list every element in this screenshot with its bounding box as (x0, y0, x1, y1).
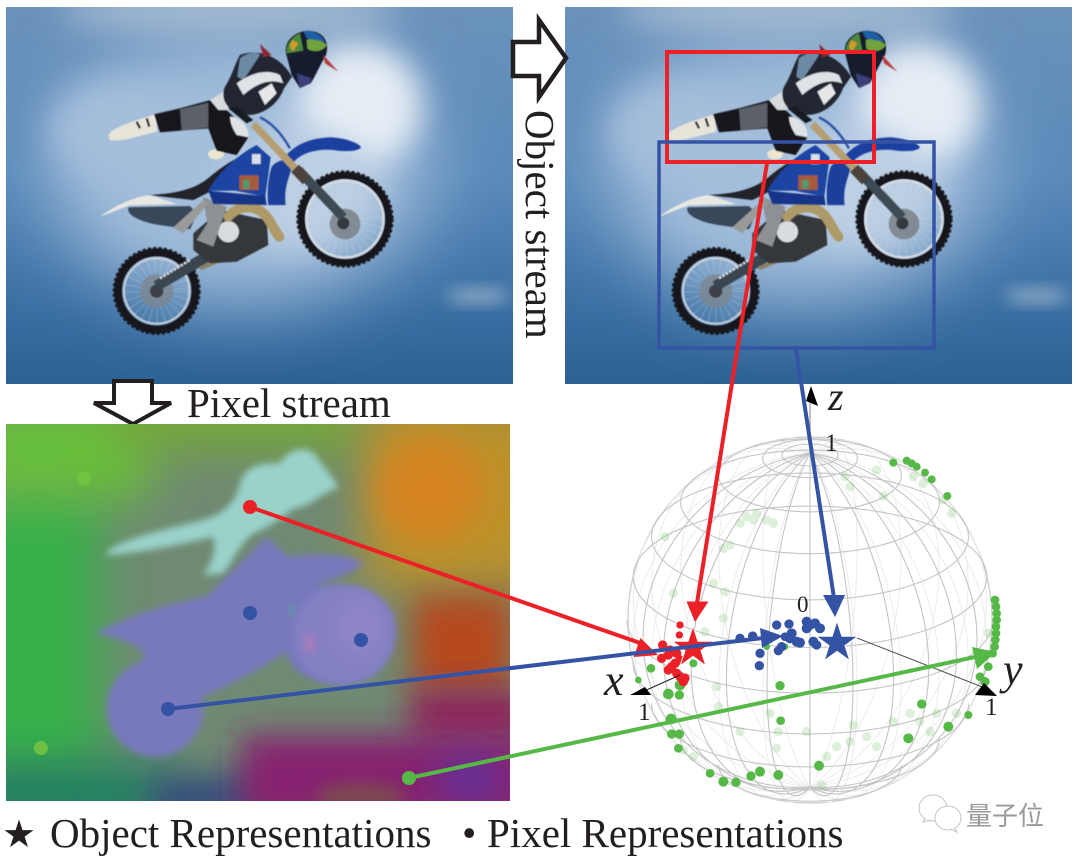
arrow: red box to object star (686, 163, 767, 622)
longitude lines (643, 453, 977, 796)
red pixel dots (657, 621, 690, 686)
axis: y: 1 (985, 694, 998, 721)
origin label: 0 (797, 592, 808, 617)
arrow: object stream (513, 20, 566, 97)
axis: x: 1 (638, 699, 650, 726)
arrow: red pixel to sphere (243, 500, 658, 657)
panel: photo with object boxes (565, 0, 1072, 384)
label: object stream: Object stream (517, 110, 563, 339)
faint back-side green dots (660, 465, 993, 790)
blue bounding box (659, 142, 934, 348)
panel: pixel embedding map (6, 424, 510, 801)
panel: input photo (6, 0, 513, 384)
arrow: green pixel to sphere (402, 647, 996, 785)
legend: object representations: ★ (2, 812, 36, 856)
latitude lines (627, 439, 993, 801)
green pixel point (34, 741, 48, 755)
legend: object representations: Object Representations (50, 810, 431, 856)
label: pixel stream: Pixel stream (187, 380, 391, 426)
rider silhouette (107, 449, 338, 575)
watermark (919, 795, 1044, 833)
green pixel dots (635, 457, 1001, 787)
axis: y: y (999, 645, 1023, 694)
blue pixel point: wheel (354, 633, 368, 647)
axis: x (603, 656, 680, 726)
legend: pixel representations: Pixel Representations (487, 810, 843, 856)
legend: pixel representations: • (462, 810, 476, 856)
arrow: blue box to object star (796, 349, 845, 617)
axis: z (806, 374, 844, 457)
bike rear wheel (107, 660, 203, 757)
axis: z: 1 (825, 430, 838, 457)
axis: y (857, 638, 1023, 721)
axis: x: x (603, 656, 624, 705)
icon: blue object star (816, 621, 858, 661)
icon: red object star (672, 626, 714, 666)
blue pixel point: body (243, 606, 257, 620)
faint pixel dot (77, 472, 91, 486)
bike silhouette (95, 537, 395, 697)
icon: chat bubbles (919, 795, 961, 832)
arrow: pixel stream (94, 381, 171, 424)
axis: z: z (827, 374, 844, 419)
red bounding box (667, 52, 874, 162)
blue pixel dots (735, 617, 825, 670)
back graticule (568, 384, 1052, 856)
sphere outline (628, 437, 992, 803)
arrow: blue pixel to sphere (161, 628, 783, 716)
chart: embedding sphere (568, 374, 1052, 856)
watermark: 量子位 (966, 796, 1044, 833)
bike front wheel (293, 585, 393, 685)
